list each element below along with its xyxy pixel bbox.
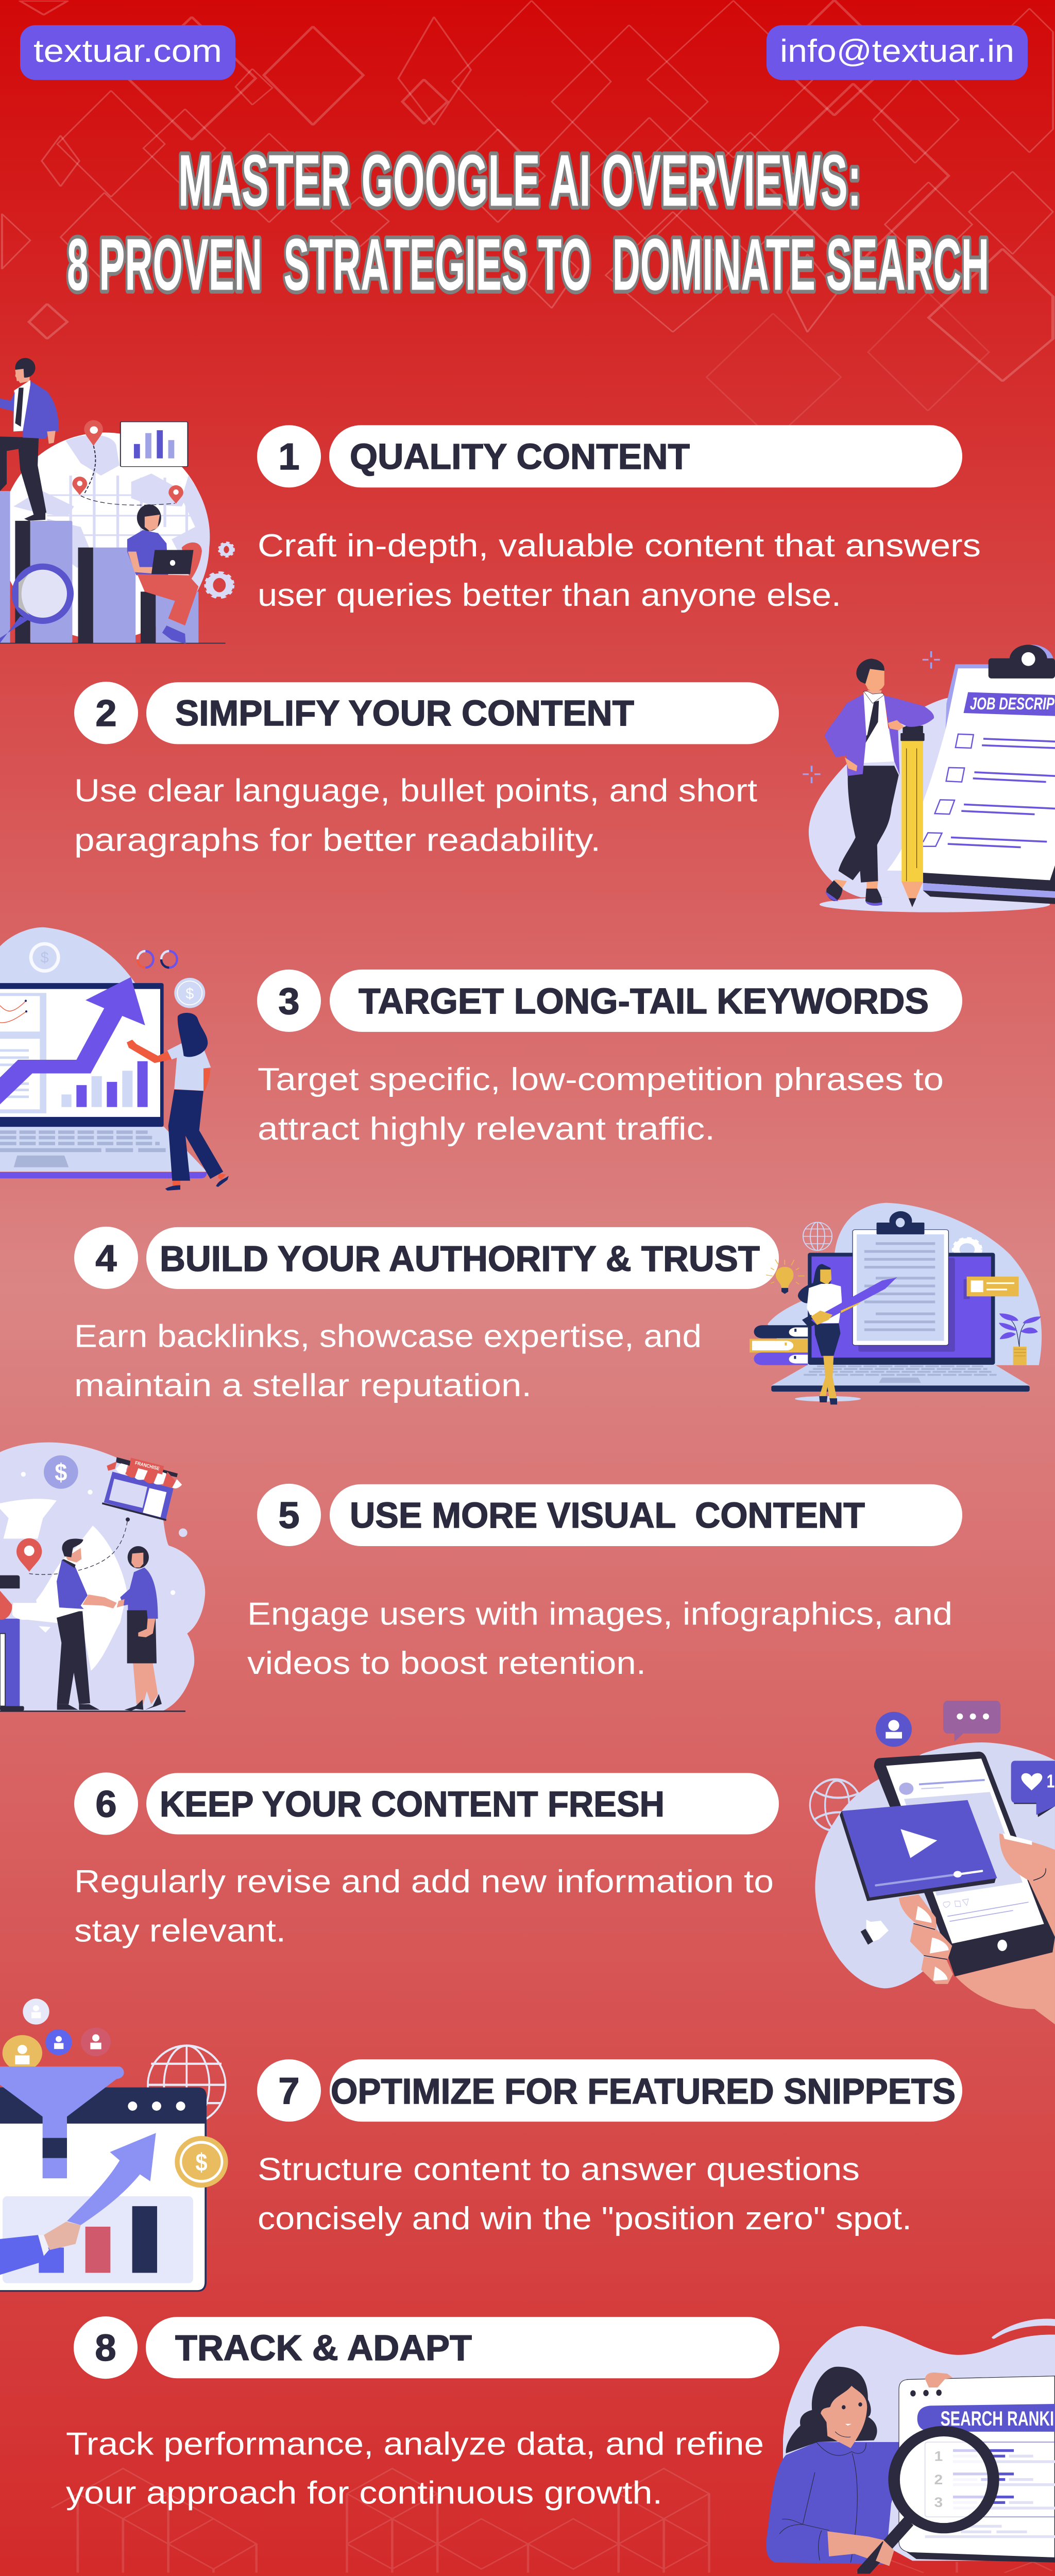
description 6 (74, 1864, 774, 1948)
heading: use more visual content: USE MORE VISUAL CONTENT (350, 1495, 865, 1535)
illustration: woman with magnifier and search rankings (766, 2319, 1055, 2574)
browser window (0, 2088, 207, 2292)
description 1: Craft in-depth, valuable content that answers (258, 528, 981, 564)
coin: $ (195, 2148, 208, 2176)
website contact pill (20, 25, 235, 80)
illustration: hand holding phone with video (810, 1701, 1055, 2024)
description 7: concisely and win the "position zero" spot. (258, 2201, 912, 2236)
description 5: videos to boost retention. (247, 1646, 646, 1681)
globe outline (148, 2046, 226, 2124)
email contact pill (767, 25, 1028, 80)
heading: keep your content fresh (146, 1773, 779, 1835)
description 1: user queries better than anyone else. (258, 577, 841, 613)
description 8: Track performance, analyze data, and refine (66, 2426, 764, 2462)
woman with laptop (127, 504, 202, 643)
woman (795, 1264, 897, 1404)
heading: simplify your content (146, 682, 779, 744)
panel 4: build your authority and trust (74, 1203, 1042, 1404)
illustration: man with pencil and job description clipboard (803, 645, 1055, 912)
illustration: funnel, browser window and growth arrow (0, 1998, 228, 2292)
growth arrow (67, 2133, 156, 2225)
illustration: laptop with growth arrow and woman (0, 927, 229, 1191)
description 5: Engage users with images, infographics, and (247, 1596, 952, 1632)
heading: quality content (329, 425, 962, 487)
panel 2: simplify your content (74, 645, 1055, 912)
description 2 (74, 773, 757, 858)
fingernails (915, 1834, 1032, 1981)
number badge 1 (257, 425, 321, 487)
like bubble: 1 (1047, 1771, 1054, 1792)
growth arrow (0, 977, 145, 1105)
search window (899, 2372, 1055, 2563)
description 2: Use clear language, bullet points, and short (74, 773, 757, 808)
location pin (16, 1538, 42, 1572)
hand (899, 1834, 1055, 2024)
description 8 (66, 2426, 764, 2511)
woman (766, 2367, 899, 2566)
woman shaking hands (117, 1546, 162, 1711)
description 3: attract highly relevant traffic. (258, 1111, 715, 1147)
heading: optimize for featured snippets (330, 2059, 962, 2122)
description 3: Target specific, low-competition phrases to (258, 1062, 944, 1097)
illustration: handshake and franchise store (0, 1443, 205, 1712)
dollar badge (44, 1455, 78, 1489)
video card (840, 1800, 997, 1901)
donut charts (138, 951, 177, 968)
user badge (876, 1712, 912, 1747)
heading: quality content: QUALITY CONTENT (350, 436, 690, 477)
pencil (900, 726, 925, 907)
panel 3: target long-tail keywords (0, 927, 962, 1191)
user icons (3, 1998, 111, 2071)
email contact pill: info@textuar.in (780, 33, 1014, 69)
panel 8: track and adapt (66, 2316, 1055, 2574)
hand and sleeve (0, 2222, 81, 2275)
search window: 1 (934, 2449, 943, 2464)
number badge 2: 2 (95, 693, 117, 734)
like bubble (1011, 1761, 1055, 1817)
heading: build your authority and trust: BUILD YOUR AUTHORITY & TRUST (160, 1239, 760, 1279)
bar chart (3, 2196, 193, 2283)
man (825, 659, 934, 906)
thumbs up (861, 1920, 889, 1945)
number badge 7: 7 (278, 2071, 300, 2112)
sparkles (803, 651, 940, 783)
heading: simplify your content: SIMPLIFY YOUR CONTENT (175, 693, 634, 733)
heading: keep your content fresh: KEEP YOUR CONTENT FRESH (160, 1784, 665, 1824)
coin: $ (185, 985, 194, 1003)
heading: use more visual content (330, 1484, 962, 1546)
screen bars (61, 1061, 148, 1107)
description 3 (258, 1062, 944, 1147)
number badge 5: 5 (278, 1495, 300, 1536)
heading: target long-tail keywords: TARGET LONG-TAIL KEYWORDS (359, 981, 929, 1021)
number badge 7 (257, 2059, 321, 2122)
gear (953, 1238, 981, 1261)
description 4: Earn backlinks, showcase expertise, and (74, 1318, 702, 1354)
coin (175, 2136, 228, 2188)
number badge 8: 8 (95, 2328, 116, 2369)
clipboard (853, 1211, 948, 1345)
illustration: laptop with growth arrow and woman: $ (41, 949, 49, 967)
description 4 (74, 1318, 702, 1403)
man figure (0, 358, 59, 521)
search window: 2 (934, 2472, 943, 2487)
books (750, 1325, 808, 1365)
description 4: maintain a stellar reputation. (74, 1368, 532, 1403)
description 1 (258, 528, 981, 613)
light bulb (766, 1260, 805, 1294)
description 5 (247, 1596, 952, 1681)
description 7 (258, 2151, 912, 2236)
panel 5: use more visual content (0, 1443, 962, 1712)
franchise store (102, 1457, 182, 1520)
panel 6: keep your content fresh (74, 1701, 1055, 2024)
description 8: your approach for continuous growth. (66, 2475, 662, 2511)
number badge 5 (257, 1484, 321, 1546)
funnel (0, 2066, 124, 2178)
heading: optimize for featured snippets: OPTIMIZE FOR FEATURED SNIPPETS (331, 2071, 956, 2111)
chart card (121, 422, 188, 467)
kiosk at left edge (0, 1575, 39, 1711)
heading: track and adapt: TRACK & ADAPT (175, 2328, 472, 2368)
description 6: Regularly revise and add new information to (74, 1864, 774, 1900)
heading: build your authority and trust (146, 1227, 779, 1289)
franchise store: FRANCHISE (134, 1460, 160, 1471)
heading: target long-tail keywords (330, 970, 962, 1032)
panel 7: optimize for featured snippets (0, 1998, 962, 2292)
coin (174, 978, 205, 1008)
number badge 8 (74, 2316, 138, 2379)
phone (874, 1752, 1055, 1976)
illustration: woman with pencil, clipboard and laptop (750, 1203, 1042, 1404)
laptop base (0, 1127, 207, 1178)
man shaking hands (57, 1539, 117, 1710)
chat bubble (943, 1701, 1000, 1742)
panel 1: quality content (0, 358, 981, 643)
number badge 4: 4 (95, 1238, 117, 1279)
magnifying glass (857, 2431, 993, 2574)
number badge 3: 3 (278, 981, 300, 1022)
dollar badge: $ (55, 1459, 67, 1486)
number badge 2 (74, 682, 138, 744)
globe outline (810, 1780, 861, 1831)
illustration: people on bar charts with globe (0, 358, 233, 643)
number badge 1: 1 (278, 436, 300, 478)
heading: track and adapt (146, 2317, 779, 2378)
woman presenter (127, 1013, 229, 1191)
yellow card (967, 1277, 1018, 1296)
number badge 3 (257, 970, 321, 1032)
title (67, 139, 989, 306)
search window: 3 (934, 2495, 943, 2511)
description 7: Structure content to answer questions (258, 2151, 860, 2187)
number badge 6: 6 (95, 1784, 117, 1825)
globe outline (803, 1222, 832, 1250)
description 2: paragraphs for better readability. (74, 822, 601, 858)
gears (206, 543, 233, 598)
description 6: stay relevant. (74, 1913, 286, 1948)
laptop base (771, 1365, 1030, 1392)
number badge 4 (74, 1227, 138, 1289)
website contact pill: textuar.com (33, 33, 222, 69)
plant (999, 1313, 1041, 1365)
number badge 6 (74, 1772, 138, 1835)
clipboard clip (989, 645, 1055, 679)
